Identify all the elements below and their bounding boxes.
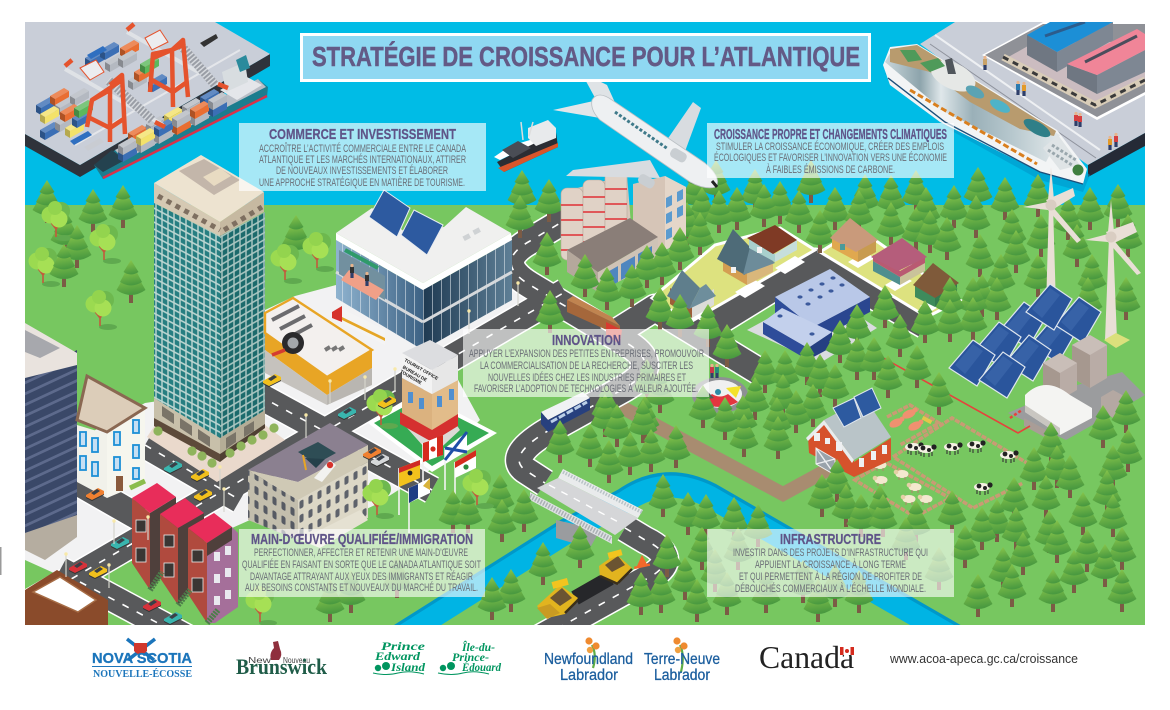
cruise dock [920, 22, 1145, 177]
body: main-d'oeuvre: AUX BESOINS CONSTANTS ET NOUVEAUX DU MARCHÉ DU TRAVAIL. [245, 581, 478, 594]
logo: Terre-Neuve et Labrador: Terre-Neuve [644, 651, 720, 668]
body: main-d'oeuvre: QUALIFIÉE EN FAISANT EN SORTE QUE LE CANADA ATLANTIQUE SOIT [242, 558, 481, 571]
plaza trees [153, 423, 279, 468]
red gantry cranes [65, 24, 228, 142]
tourist office sign: TOURISME [399, 369, 423, 385]
power line [878, 355, 1030, 433]
tourist office [366, 340, 458, 442]
road network [30, 216, 925, 652]
red barn [806, 388, 891, 477]
yard containers [36, 40, 167, 140]
glass office building [336, 190, 512, 350]
body: infrastructure: DÉBOUCHÉS COMMERCIAUX À L’ÉCHELLE MONDIALE. [735, 582, 926, 595]
body: commerce: UNE APPROCHE STRATÉGIQUE EN MATIÈRE DE TOURISME. [259, 176, 465, 189]
Prince Edward Island flag [455, 450, 476, 478]
green land [25, 205, 1145, 625]
round trees on the west side [28, 201, 334, 330]
logo: Newfoundland and Labrador: Labrador [560, 667, 619, 684]
body: commerce: ACCROÎTRE L’ACTIVITÉ COMMERCIALE ENTRE LE CANADA [259, 142, 466, 155]
logo: New Brunswick [236, 641, 328, 679]
heading: croissance propre: CROISSANCE PROPRE ET CHANGEMENTS CLIMATIQUES [714, 127, 947, 143]
container ship [94, 55, 268, 179]
body: commerce: DE NOUVEAUX INVESTISSEMENTS ET ÉLABORER [276, 164, 448, 177]
heading: commerce: COMMERCE ET INVESTISSEMENT [269, 127, 456, 143]
innovation roundabout [692, 364, 748, 413]
log truck [567, 296, 622, 344]
tourist office sign: TOURIST OFFICE [404, 358, 439, 381]
cruise ship [883, 44, 1090, 192]
logo: Nova Scotia: NOUVELLE-ÉCOSSE [93, 668, 192, 680]
body: infrastructure: APPUIENT LA CROISSANCE À LONG TERME [755, 558, 906, 571]
body: innovation [469, 348, 704, 395]
logo: Terre-Neuve et Labrador [644, 637, 720, 684]
container port [25, 22, 270, 179]
logo: Nova Scotia: NOVA SCOTIA [92, 650, 192, 667]
logo: New Brunswick: New [248, 656, 271, 665]
Canada flag [423, 435, 443, 462]
house 6 [913, 263, 959, 307]
solar field [949, 284, 1101, 398]
logo: Île-du-Prince-Édouard [438, 640, 502, 674]
panel: commerce et investissement [239, 123, 486, 191]
terminal planters [1003, 57, 1145, 105]
body: innovation: APPUYER L’EXPANSION DES PETITES ENTREPRISES, PROMOUVOIR [469, 348, 704, 360]
website address: www.acoa-apeca.gc.ca/croissance [889, 651, 1078, 666]
body: infrastructure [733, 547, 928, 595]
port trucks [70, 34, 218, 151]
dark tower [25, 323, 77, 560]
body: main-d'oeuvre [242, 547, 481, 594]
body: innovation: NOUVELLES IDÉES CHEZ LES INDUSTRIES PRIMAIRES ET [488, 371, 686, 384]
hangar pad [747, 308, 877, 360]
tire shop [265, 298, 372, 405]
body: main-d'oeuvre: DAVANTAGE ATTRAYANT AUX YEUX DES IMMIGRANTS ET RÉAGIR [250, 570, 473, 583]
road rollers and cone [537, 549, 650, 619]
left margin mark [0, 547, 2, 575]
residential lots [652, 228, 960, 322]
logo: Prince Edward Island [373, 639, 426, 674]
logo: Prince Edward Island: Island [390, 660, 426, 674]
tower plaza [147, 425, 285, 482]
New Brunswick flag [399, 460, 420, 487]
river [400, 485, 965, 644]
heading: infrastructure: INFRASTRUCTURE [780, 532, 881, 548]
driveways [690, 255, 937, 322]
delivery truck [332, 306, 385, 345]
title banner [302, 34, 870, 80]
house 3 [747, 225, 797, 262]
power plant [1008, 335, 1145, 440]
title text: STRATÉGIE DE CROISSANCE POUR L’ATLANTIQUE [312, 41, 860, 72]
house 1 [667, 270, 716, 318]
logo: Newfoundland and Labrador [544, 637, 633, 684]
body: croissance propre: À FAIBLES ÉMISSIONS DE CARBONE. [766, 163, 895, 176]
pigs [888, 407, 932, 433]
logo: Île-du-Prince-Édouard: Prince- [452, 650, 489, 664]
logo: Newfoundland and Labrador: Newfoundland [544, 651, 633, 668]
dock line and passengers [930, 35, 1118, 158]
city pavement [25, 285, 535, 578]
panel: innovation [463, 329, 709, 397]
logo: Prince Edward Island: Edward [374, 649, 421, 663]
bridge [530, 469, 643, 548]
cargo vessel [494, 120, 558, 172]
farm fences [855, 405, 1027, 517]
Nova Scotia flag [445, 432, 467, 460]
provincial and national flags [399, 432, 476, 533]
body: infrastructure: INVESTIR DANS DES PROJETS D’INFRASTRUCTURE QUI [733, 547, 928, 559]
body: croissance propre [714, 140, 947, 176]
blue and white heritage building [77, 376, 145, 498]
tourist office sign: BUREAU DE [402, 365, 428, 383]
tourist office sign [398, 358, 439, 391]
crane booms [65, 30, 225, 125]
logo: Île-du-Prince-Édouard: Édouard [461, 660, 502, 674]
trees behind buildings [32, 160, 1142, 260]
body: croissance propre: ÉCOLOGIQUES ET FAVORISER L’INNOVATION VERS UNE ÉCONOMIE [714, 151, 947, 164]
fresh asphalt strip [575, 578, 610, 598]
airplane [553, 72, 718, 190]
street cars [69, 374, 396, 625]
logo: New Brunswick: Nouveau [283, 656, 310, 665]
middle trees [50, 224, 1140, 347]
graduation cap and diploma [298, 442, 336, 482]
heading: main-d'oeuvre: MAIN-D’ŒUVRE QUALIFIÉE/IMMIGRATION [251, 531, 473, 548]
university building [248, 423, 368, 548]
logo: Île-du-Prince-Édouard: Île-du- [461, 640, 495, 654]
dirt road to farm [612, 402, 838, 494]
house 4 [830, 218, 878, 262]
sky and sea [25, 22, 1145, 212]
body: innovation: FAVORISER L’ADOPTION DE TECHNOLOGIES À VALEUR AJOUTÉE. [474, 382, 698, 395]
logo: Terre-Neuve et Labrador: Labrador [654, 667, 711, 684]
logo: Prince Edward Island: Prince [381, 639, 426, 653]
panel: croissance propre [707, 123, 954, 178]
trees around the barn [590, 314, 1140, 438]
brown corner building [25, 570, 108, 625]
panel: main-d'oeuvre [239, 529, 485, 597]
body: commerce: ATLANTIQUE ET LES MARCHÉS INTERNATIONAUX, ATTIRER [259, 153, 466, 166]
red townhouses [132, 483, 238, 623]
terminal buildings [1027, 22, 1145, 94]
panel: infrastructure [707, 529, 954, 597]
foreground trees [246, 397, 1142, 626]
body: main-d'oeuvre: PERFECTIONNER, AFFECTER ET RETENIR UNE MAIN-D’ŒUVRE [254, 547, 468, 559]
cows [905, 440, 1019, 495]
logo: Nova Scotia [92, 639, 192, 680]
heading: innovation: INNOVATION [552, 333, 621, 349]
logo: Canada wordmark: Canada [759, 639, 854, 675]
tall tower [154, 155, 265, 462]
blue hangar [763, 269, 870, 360]
body: innovation: LA COMMERCIALISATION DE LA RECHERCHE, SUSCITER LES [480, 360, 693, 372]
body: infrastructure: ET QUI PERMETTENT À LA RÉGION DE PROFITER DE [739, 570, 922, 583]
bus [541, 392, 590, 432]
Newfoundland flag [409, 478, 430, 503]
factory with silos [561, 172, 686, 292]
sheep [872, 461, 932, 505]
house 2 [717, 229, 775, 285]
street lamps [64, 281, 520, 588]
wind turbines [1023, 167, 1141, 348]
body: croissance propre: STIMULER LA CROISSANCE ÉCONOMIQUE, CRÉER DES EMPLOIS [716, 140, 944, 153]
logo: New Brunswick: Brunswick [236, 654, 328, 679]
house 5 [871, 238, 927, 285]
body: commerce [259, 142, 466, 189]
tourist office lawn [368, 393, 497, 472]
